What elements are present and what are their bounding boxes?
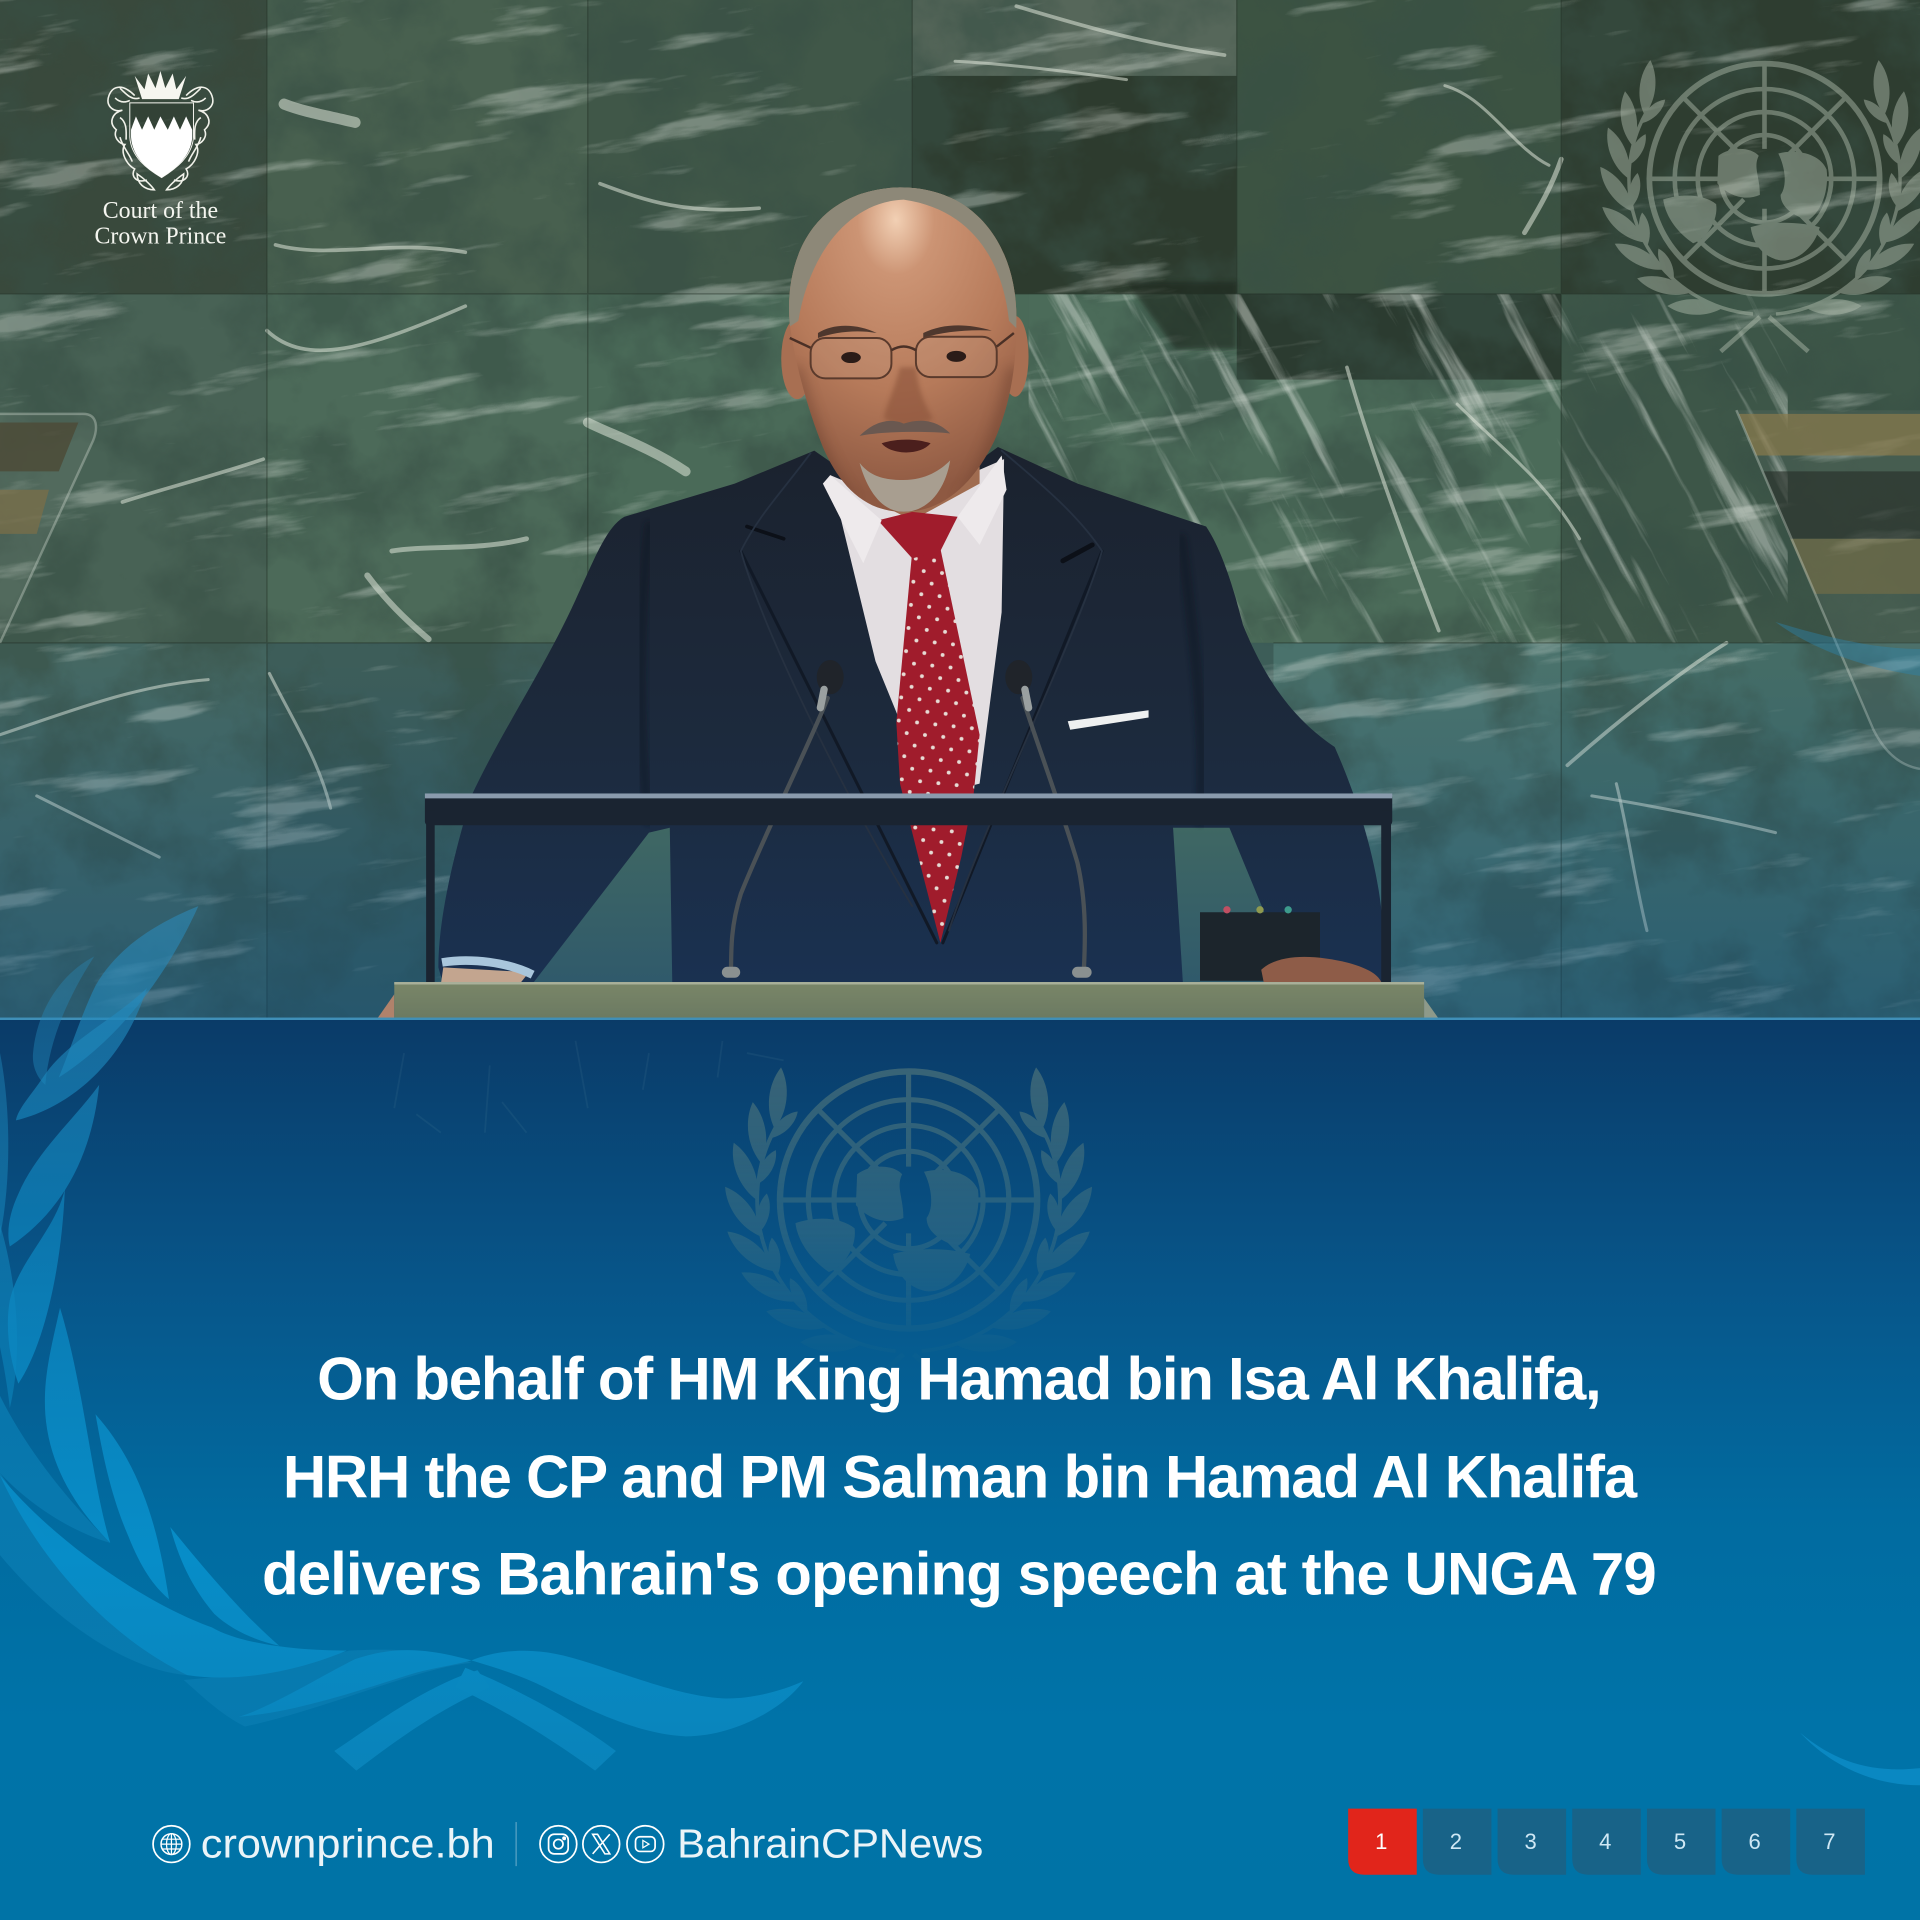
page 4: 4 <box>1599 1829 1611 1854</box>
icon: instagram <box>540 1826 577 1862</box>
icon: X <box>583 1826 620 1862</box>
speaker ears <box>781 316 1029 399</box>
title: HRH the CP and PM Salman bin Hamad Al Khalifa <box>283 1444 1638 1511</box>
laurel: bright front leaves <box>0 906 347 1677</box>
logo: Court of the Crown Prince <box>94 71 226 250</box>
footer contact links <box>153 1821 983 1867</box>
gap between left arm and torso <box>534 828 672 982</box>
marble wall background <box>0 0 1920 1018</box>
pocket square <box>1068 710 1149 730</box>
gap between right arm and torso <box>1173 828 1293 982</box>
title: On behalf of HM King Hamad bin Isa Al Khalifa, <box>317 1346 1602 1413</box>
speaker left cuff and hand <box>441 961 533 984</box>
page 7: 7 <box>1823 1829 1836 1854</box>
crest shield <box>130 103 193 178</box>
page 2: 2 <box>1450 1829 1462 1854</box>
laurel wreath decoration left <box>0 906 803 1771</box>
marble mottling <box>0 0 1920 1020</box>
speaker neck <box>845 453 980 520</box>
laurel: dim back leaves <box>0 956 471 1727</box>
website text: crownprince.bh <box>201 1821 495 1867</box>
icon: youtube <box>627 1826 664 1862</box>
page 6: 6 <box>1749 1829 1761 1854</box>
page 7 <box>1796 1809 1865 1875</box>
lower blue panel <box>0 1018 1920 1514</box>
podium ledge <box>377 982 1439 1019</box>
microphones <box>727 660 1086 973</box>
logo text <box>94 198 226 250</box>
speaker glasses <box>790 333 1014 378</box>
page 3: 3 <box>1524 1829 1537 1854</box>
marble veins: soft horizontal <box>0 0 1920 1018</box>
marble veins: hand-placed bright streaks <box>0 6 1776 931</box>
speaker head <box>783 184 1022 512</box>
panel seams <box>0 0 1920 1020</box>
page 2 <box>1423 1809 1491 1875</box>
divider <box>516 1822 517 1866</box>
crest <box>108 71 213 190</box>
crest crown <box>135 71 186 99</box>
blue tint over lower wall <box>0 707 1920 1018</box>
logo text: Crown Prince <box>94 224 226 250</box>
page 1 active <box>1348 1809 1417 1875</box>
speaker suit jacket <box>438 447 1384 984</box>
marble veins: diagonal right panel <box>1028 294 1788 643</box>
UN emblem on lectern <box>725 1068 1092 1330</box>
faint scratch texture <box>394 1041 784 1133</box>
page indicator <box>1348 1809 1865 1875</box>
crest foliage outline <box>108 87 213 190</box>
title: delivers Bahrain's opening speech at the UNGA 79 <box>262 1540 1657 1607</box>
title <box>262 1346 1657 1607</box>
icon: globe <box>153 1826 190 1862</box>
teleprompter glass left <box>0 414 96 643</box>
speaker collar <box>823 456 1007 563</box>
lectern rail <box>425 793 1392 982</box>
speaker shirt <box>830 459 1004 796</box>
UN emblem on wall <box>1594 59 1920 351</box>
page 6 <box>1722 1809 1790 1875</box>
laurel: ribbon <box>239 1650 803 1771</box>
page 5: 5 <box>1674 1829 1686 1854</box>
social handle text: BahrainCPNews <box>677 1821 983 1867</box>
teleprompter glass right <box>1736 410 1920 769</box>
page 5 <box>1647 1809 1716 1875</box>
corner laurel leaf right <box>1800 1733 1920 1785</box>
marble panels: tonal tiles <box>0 0 1920 1020</box>
page 4 <box>1572 1809 1641 1875</box>
marble dark patch behind shoulder <box>1127 282 1237 349</box>
logo text: Court of the <box>103 198 218 224</box>
page 1 active: 1 <box>1375 1829 1387 1854</box>
speaker jacket shading <box>641 451 1202 943</box>
speaker right hand <box>1261 957 1381 982</box>
speaker figure <box>377 184 1439 1019</box>
page 3 <box>1498 1809 1566 1875</box>
speaker tie <box>878 512 980 943</box>
voting box <box>1200 906 1320 981</box>
